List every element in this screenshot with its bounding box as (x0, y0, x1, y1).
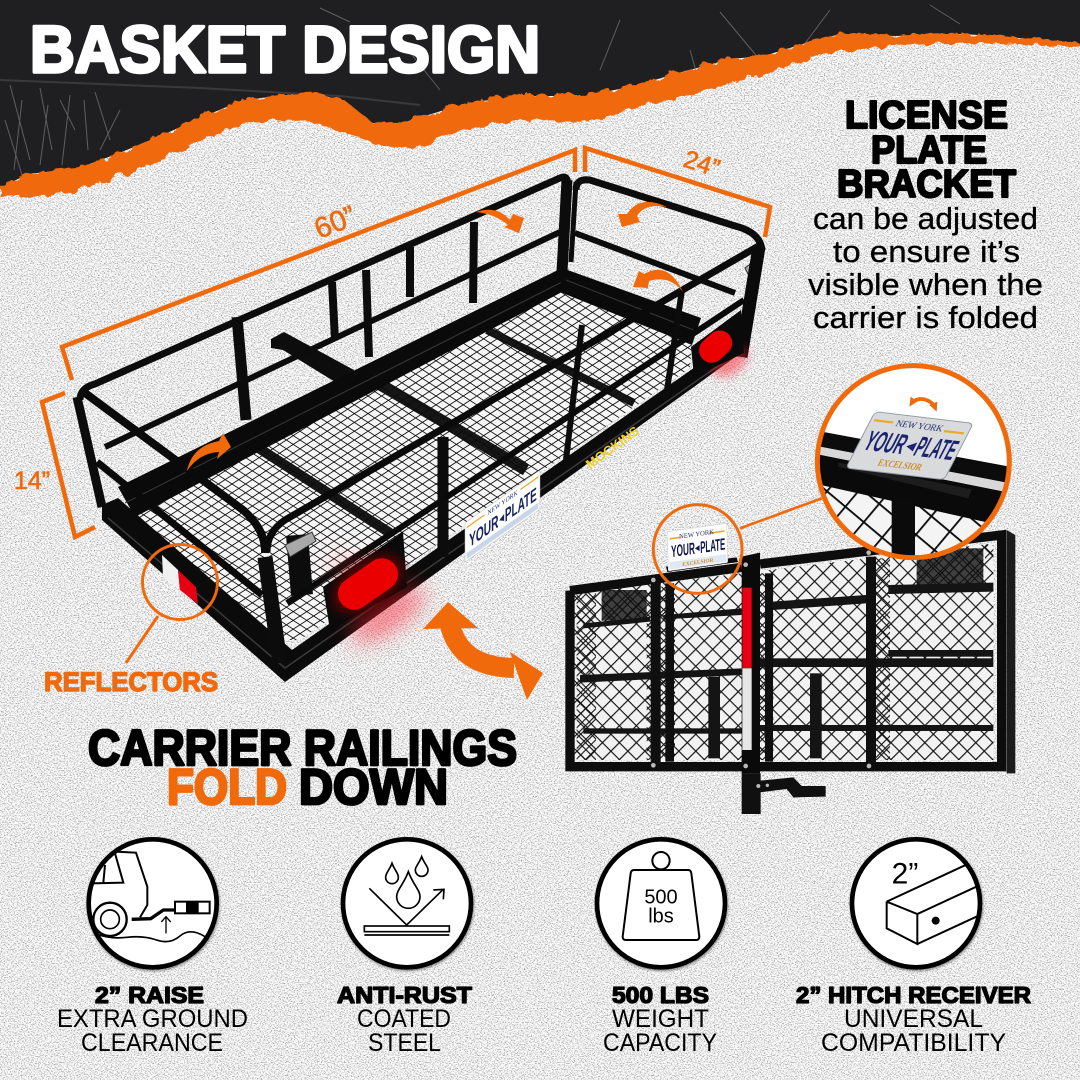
icon: ground clearance raise (89, 839, 217, 967)
small license plate: EXCELSIOR (682, 558, 714, 568)
tail light left (321, 532, 433, 653)
folded carrier photo illustration (570, 366, 1015, 814)
caption: 2 inch hitch receiver (796, 982, 1031, 1057)
reflector callout (44, 544, 218, 697)
base frame near band (102, 332, 745, 682)
text block: license plate bracket: can be adjusted (813, 201, 1038, 236)
near side rails (85, 244, 762, 603)
center post and hitch mast (742, 553, 760, 773)
rear post right corner (741, 247, 759, 357)
heading: carrier railings fold down: FOLD (167, 759, 287, 815)
caption: 500 lbs: 500 LBS (612, 982, 709, 1008)
reflector label: REFLECTORS (44, 667, 218, 697)
caption: anti-rust: ANTI-RUST (337, 982, 472, 1008)
hitch bar (271, 332, 354, 388)
title: BASKET DESIGN (30, 12, 540, 86)
icon: 500 lbs weight: lbs (648, 906, 674, 928)
magnified license plate: PLATE (909, 431, 964, 466)
caption: 500 lbs: CAPACITY (603, 1029, 717, 1057)
far side rails and posts (80, 177, 762, 447)
text block: license plate bracket (808, 94, 1043, 335)
icon: 500 lbs weight (597, 839, 725, 967)
dimension: 60 inch length: 60” (310, 200, 361, 246)
reflector white and red (162, 555, 198, 604)
license plate on basket: NEW YORK (487, 489, 518, 517)
license plate on basket: YOUR (469, 510, 499, 552)
near side posts (77, 290, 682, 663)
magnified license plate (846, 412, 973, 480)
magnified mesh (823, 486, 984, 555)
header: orange torn brush stroke (0, 33, 1080, 197)
dark panels behind mesh (602, 548, 983, 621)
fold arrow rear top (618, 202, 667, 227)
header: dark torn band (0, 0, 1080, 188)
text block: license plate bracket: LICENSE (845, 94, 1008, 137)
caption: anti-rust: COATED (357, 1005, 451, 1033)
caption: 500 lbs: WEIGHT (612, 1005, 709, 1033)
dimension: 24 inch width: 24” (680, 145, 723, 183)
caption: 2 inch raise (57, 982, 248, 1057)
caption: anti-rust (337, 982, 472, 1057)
small license plate (667, 523, 728, 571)
outer frame (570, 535, 1002, 767)
magnified license plate: YOUR (859, 425, 914, 460)
caption: 2 inch raise: EXTRA GROUND (57, 1005, 248, 1033)
icon: water resistant coating (343, 839, 471, 967)
icon: 2 inch hitch receiver tube: 2” (892, 857, 918, 890)
magnified circle ring (817, 366, 1009, 558)
small license plate: PLATE (700, 535, 726, 557)
dimension: 60 inch length (62, 150, 575, 380)
fold arrow rear bottom (633, 270, 683, 292)
caption: 500 lbs (603, 982, 717, 1057)
icon: 500 lbs weight: 500 (644, 886, 678, 908)
magnified license plate: EXCELSIOR (876, 457, 924, 473)
fold arrow far side (476, 210, 524, 233)
horizontal crossbars (580, 583, 993, 758)
text block: license plate bracket: visible when the (808, 267, 1043, 302)
brand logo on frame: MOCKINS (583, 423, 642, 472)
caption: 2 inch raise: CLEARANCE (81, 1029, 223, 1057)
hitch receiver (742, 773, 826, 814)
basket floor mesh (135, 292, 692, 640)
text block: license plate bracket: BRACKET (837, 163, 1016, 206)
license plate on basket (465, 470, 540, 562)
fold arrow near left (187, 433, 231, 471)
base frame rear band (560, 268, 701, 345)
bolts (651, 550, 871, 788)
text block: license plate bracket: carrier is folded (813, 300, 1038, 335)
heading: carrier railings fold down (88, 720, 517, 815)
caption: 2 inch raise: 2” RAISE (95, 982, 204, 1008)
magnified rail (821, 432, 1007, 482)
latch brackets (285, 258, 760, 557)
floor cross bars (257, 330, 634, 533)
large double-headed arrow (423, 602, 543, 700)
center reflector strip (742, 588, 752, 750)
side hinge edge (1007, 530, 1015, 773)
caption: 2 inch hitch receiver: COMPATIBILITY (821, 1029, 1006, 1057)
text block: license plate bracket: PLATE (871, 129, 987, 172)
dimension: 14 inch height (14, 393, 95, 537)
text block: license plate bracket: to ensure it’s (833, 234, 1020, 269)
dense mesh strips (577, 545, 993, 760)
heading: carrier railings fold down: DOWN (299, 759, 448, 815)
caption: 2 inch hitch receiver: 2” HITCH RECEIVER (796, 982, 1031, 1008)
small license plate: NEW YORK (679, 529, 714, 541)
magnified bracket circle (817, 366, 1013, 567)
cargo basket photo illustration (77, 177, 762, 682)
carrier mesh (573, 543, 993, 760)
caption: 2 inch hitch receiver: UNIVERSAL (844, 1005, 983, 1033)
folding arrows on basket (187, 202, 683, 471)
heading: carrier railings fold down: CARRIER RAILINGS (88, 720, 517, 776)
caption: anti-rust: STEEL (368, 1029, 441, 1057)
dimension: 24 inch width (585, 145, 770, 237)
icon: 2 inch hitch receiver tube (852, 839, 980, 967)
magnified pivot arrow (909, 397, 937, 412)
small plate bracket (666, 557, 738, 572)
small license plate: YOUR (671, 539, 695, 561)
magnified plate mount (838, 463, 972, 498)
callout connector line (740, 498, 822, 528)
dimension: 14 inch height: 14” (14, 467, 50, 495)
vertical posts (651, 557, 876, 765)
base frame far band (118, 268, 562, 517)
tail light right (691, 310, 753, 383)
magnified license plate: NEW YORK (894, 419, 946, 434)
license plate on basket: PLATE (505, 483, 537, 526)
small callout circle (653, 505, 742, 593)
